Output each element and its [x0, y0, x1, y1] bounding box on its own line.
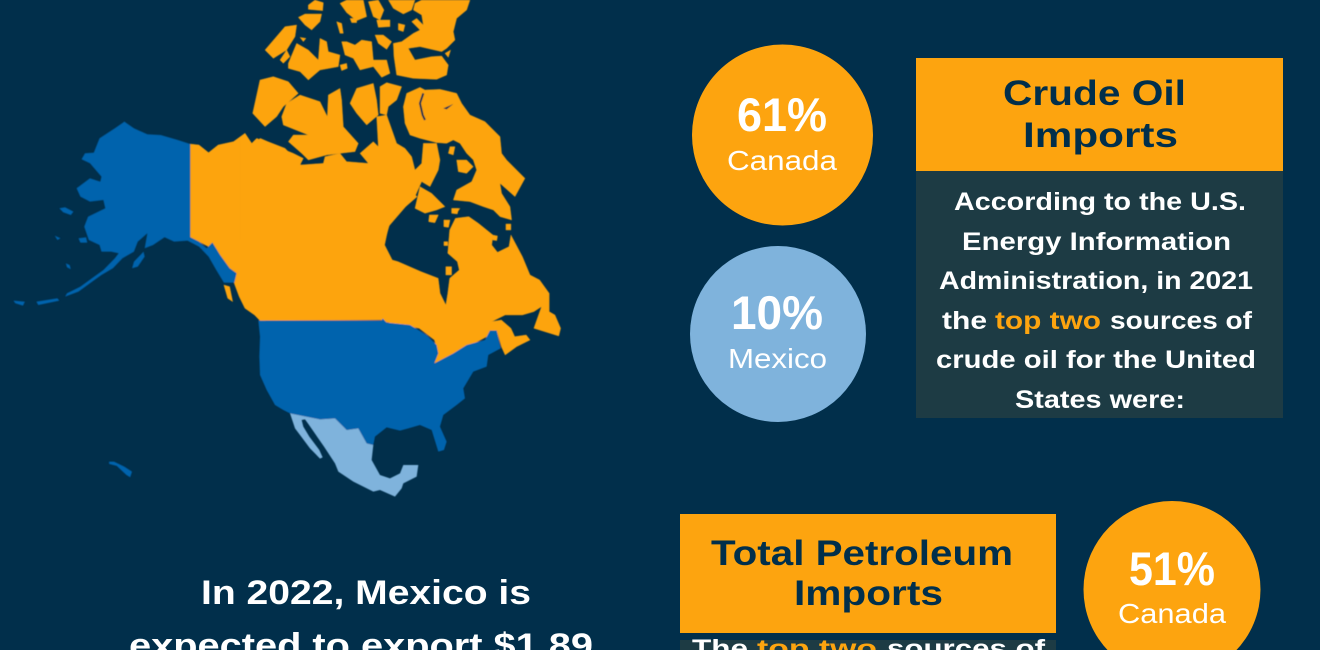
panel: total petroleum imports: [680, 514, 1056, 650]
map: Mexico: [290, 413, 418, 497]
map: contiguous United States: [258, 318, 501, 452]
stat circle: 61% Canada: [692, 44, 873, 226]
text block: crude oil sources: Administration, in 2021: [939, 267, 1253, 295]
text block: crude oil sources: top two: [995, 307, 1101, 335]
stat circle: 10% Mexico: Mexico: [728, 343, 827, 374]
map: Canada: [190, 0, 561, 363]
text block: crude oil sources: the: [942, 307, 987, 335]
text block: crude oil sources: [916, 171, 1283, 418]
heading: crude oil imports: Crude Oil: [1003, 74, 1186, 113]
heading: crude oil imports: Imports: [1023, 116, 1178, 155]
text: Mexico export statement: [129, 574, 593, 650]
stat circle: 10% Mexico: [690, 246, 866, 422]
text block: crude oil sources: States were:: [1015, 386, 1185, 414]
text block: crude oil sources: sources of: [1110, 307, 1253, 335]
text block: crude oil sources: crude oil for the United: [936, 346, 1256, 374]
text block: crude oil sources: Energy Information: [962, 228, 1231, 256]
heading: total petroleum imports: Imports: [794, 574, 943, 613]
heading: crude oil imports: [916, 58, 1283, 171]
stat circle: 51% Canada: [1084, 501, 1260, 650]
map: Alaska and Hawaii: [13, 122, 237, 477]
heading: total petroleum imports: [680, 514, 1056, 633]
text: Mexico export statement: In 2022, Mexico is: [201, 574, 531, 612]
panel: crude oil imports: [916, 58, 1283, 418]
text block: crude oil sources: According to the U.S.: [954, 188, 1246, 216]
heading: total petroleum imports: Total Petroleum: [711, 534, 1013, 573]
stat circle: 61% Canada: 61%: [737, 88, 827, 141]
text block: petroleum sources: [680, 635, 1056, 650]
stat circle: 51% Canada: 51%: [1129, 542, 1215, 595]
stat circle: 51% Canada: Canada: [1118, 598, 1226, 629]
stat circle: 10% Mexico: 10%: [731, 286, 823, 339]
stat circle: 61% Canada: Canada: [727, 145, 837, 176]
map of North America: [13, 0, 561, 497]
